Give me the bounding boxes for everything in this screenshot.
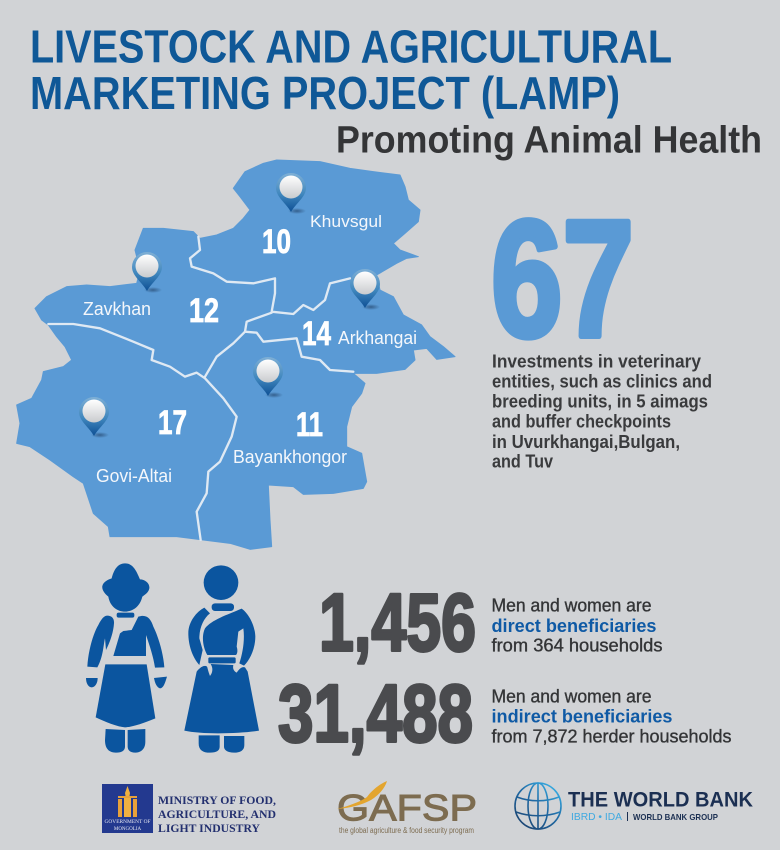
stat: indirect beneficiaries [278, 668, 732, 760]
logo: GAFSP: GAFSP [337, 788, 477, 828]
number 1,456: 1,456 [319, 578, 476, 668]
subtitle: Promoting Animal Health [336, 120, 762, 162]
title: LIVESTOCK AND AGRICULTURAL [30, 20, 672, 72]
emblem [102, 784, 153, 833]
aimag labels: Govi-Altai [96, 466, 172, 486]
investments description: and buffer checkpoints [492, 410, 671, 432]
big number 67: 67 [491, 187, 634, 372]
icon: figure without hat [184, 565, 259, 753]
direct beneficiaries text [492, 596, 662, 656]
direct beneficiaries text: direct beneficiaries [492, 616, 656, 636]
investments description [492, 350, 712, 472]
direct beneficiaries text: from 364 households [492, 636, 662, 656]
pin: Bayankhongor [253, 357, 283, 398]
logo: GAFSP [337, 781, 477, 835]
logo: the world bank [515, 783, 753, 829]
aimag investment counts: 11 [296, 406, 323, 444]
logo: GAFSP: the global agriculture & food security program [339, 826, 474, 835]
title [30, 20, 672, 119]
logo: ministry of food, agriculture and light industry [102, 784, 276, 835]
direct beneficiaries text: Men and women are [492, 596, 652, 616]
ministry name: AGRICULTURE, AND [158, 809, 276, 821]
indirect beneficiaries text: indirect beneficiaries [492, 707, 672, 727]
aimag labels [83, 212, 417, 486]
ministry name [158, 795, 276, 835]
icon: wheat ear [337, 781, 387, 809]
logo: the world bank: THE WORLD BANK [568, 789, 753, 812]
indirect beneficiaries text: from 7,872 herder households [492, 727, 732, 747]
indirect beneficiaries text [492, 687, 732, 747]
emblem: MONGOLIA [114, 827, 141, 832]
ministry name: MINISTRY OF FOOD, [158, 795, 276, 807]
title: MARKETING PROJECT (LAMP) [30, 67, 620, 119]
emblem: GOVERNMENT OF [104, 820, 151, 825]
aimag labels: Khuvsgul [310, 212, 382, 231]
icon: figure with hat [86, 563, 167, 753]
investments description: in Uvurkhangai,Bulgan, [492, 431, 680, 452]
indirect beneficiaries text: Men and women are [492, 687, 652, 707]
aimag labels: Bayankhongor [233, 447, 347, 467]
aimag labels: Zavkhan [83, 299, 151, 319]
icon: globe [515, 783, 561, 829]
icon: figures in traditional dress [86, 563, 259, 753]
aimag investment counts [158, 223, 331, 444]
map regions outline [17, 160, 455, 549]
number 31,488: 31,488 [278, 668, 473, 760]
aimag investment counts: 10 [262, 223, 291, 261]
map of five aimags [17, 160, 455, 549]
investments description: Investments in veterinary [492, 350, 702, 372]
aimag investment counts: 14 [302, 315, 331, 353]
pin: Arkhangai [350, 269, 380, 310]
stat: direct beneficiaries [319, 578, 662, 668]
pin: Govi-Altai [79, 397, 109, 438]
investments description: breeding units, in 5 aimags [492, 390, 708, 412]
investments description: entities, such as clinics and [492, 370, 712, 392]
aimag labels: Arkhangai [338, 328, 417, 348]
logo: the world bank: IBRD • IDA [571, 811, 622, 823]
pin: Khuvsgul [276, 173, 306, 214]
pin: Zavkhan [132, 252, 162, 293]
logo: the world bank: WORLD BANK GROUP [633, 812, 718, 822]
aimag investment counts: 17 [158, 404, 187, 442]
investments description: and Tuv [492, 450, 554, 472]
aimag investment counts: 12 [189, 292, 219, 330]
ministry name: LIGHT INDUSTRY [158, 823, 261, 835]
